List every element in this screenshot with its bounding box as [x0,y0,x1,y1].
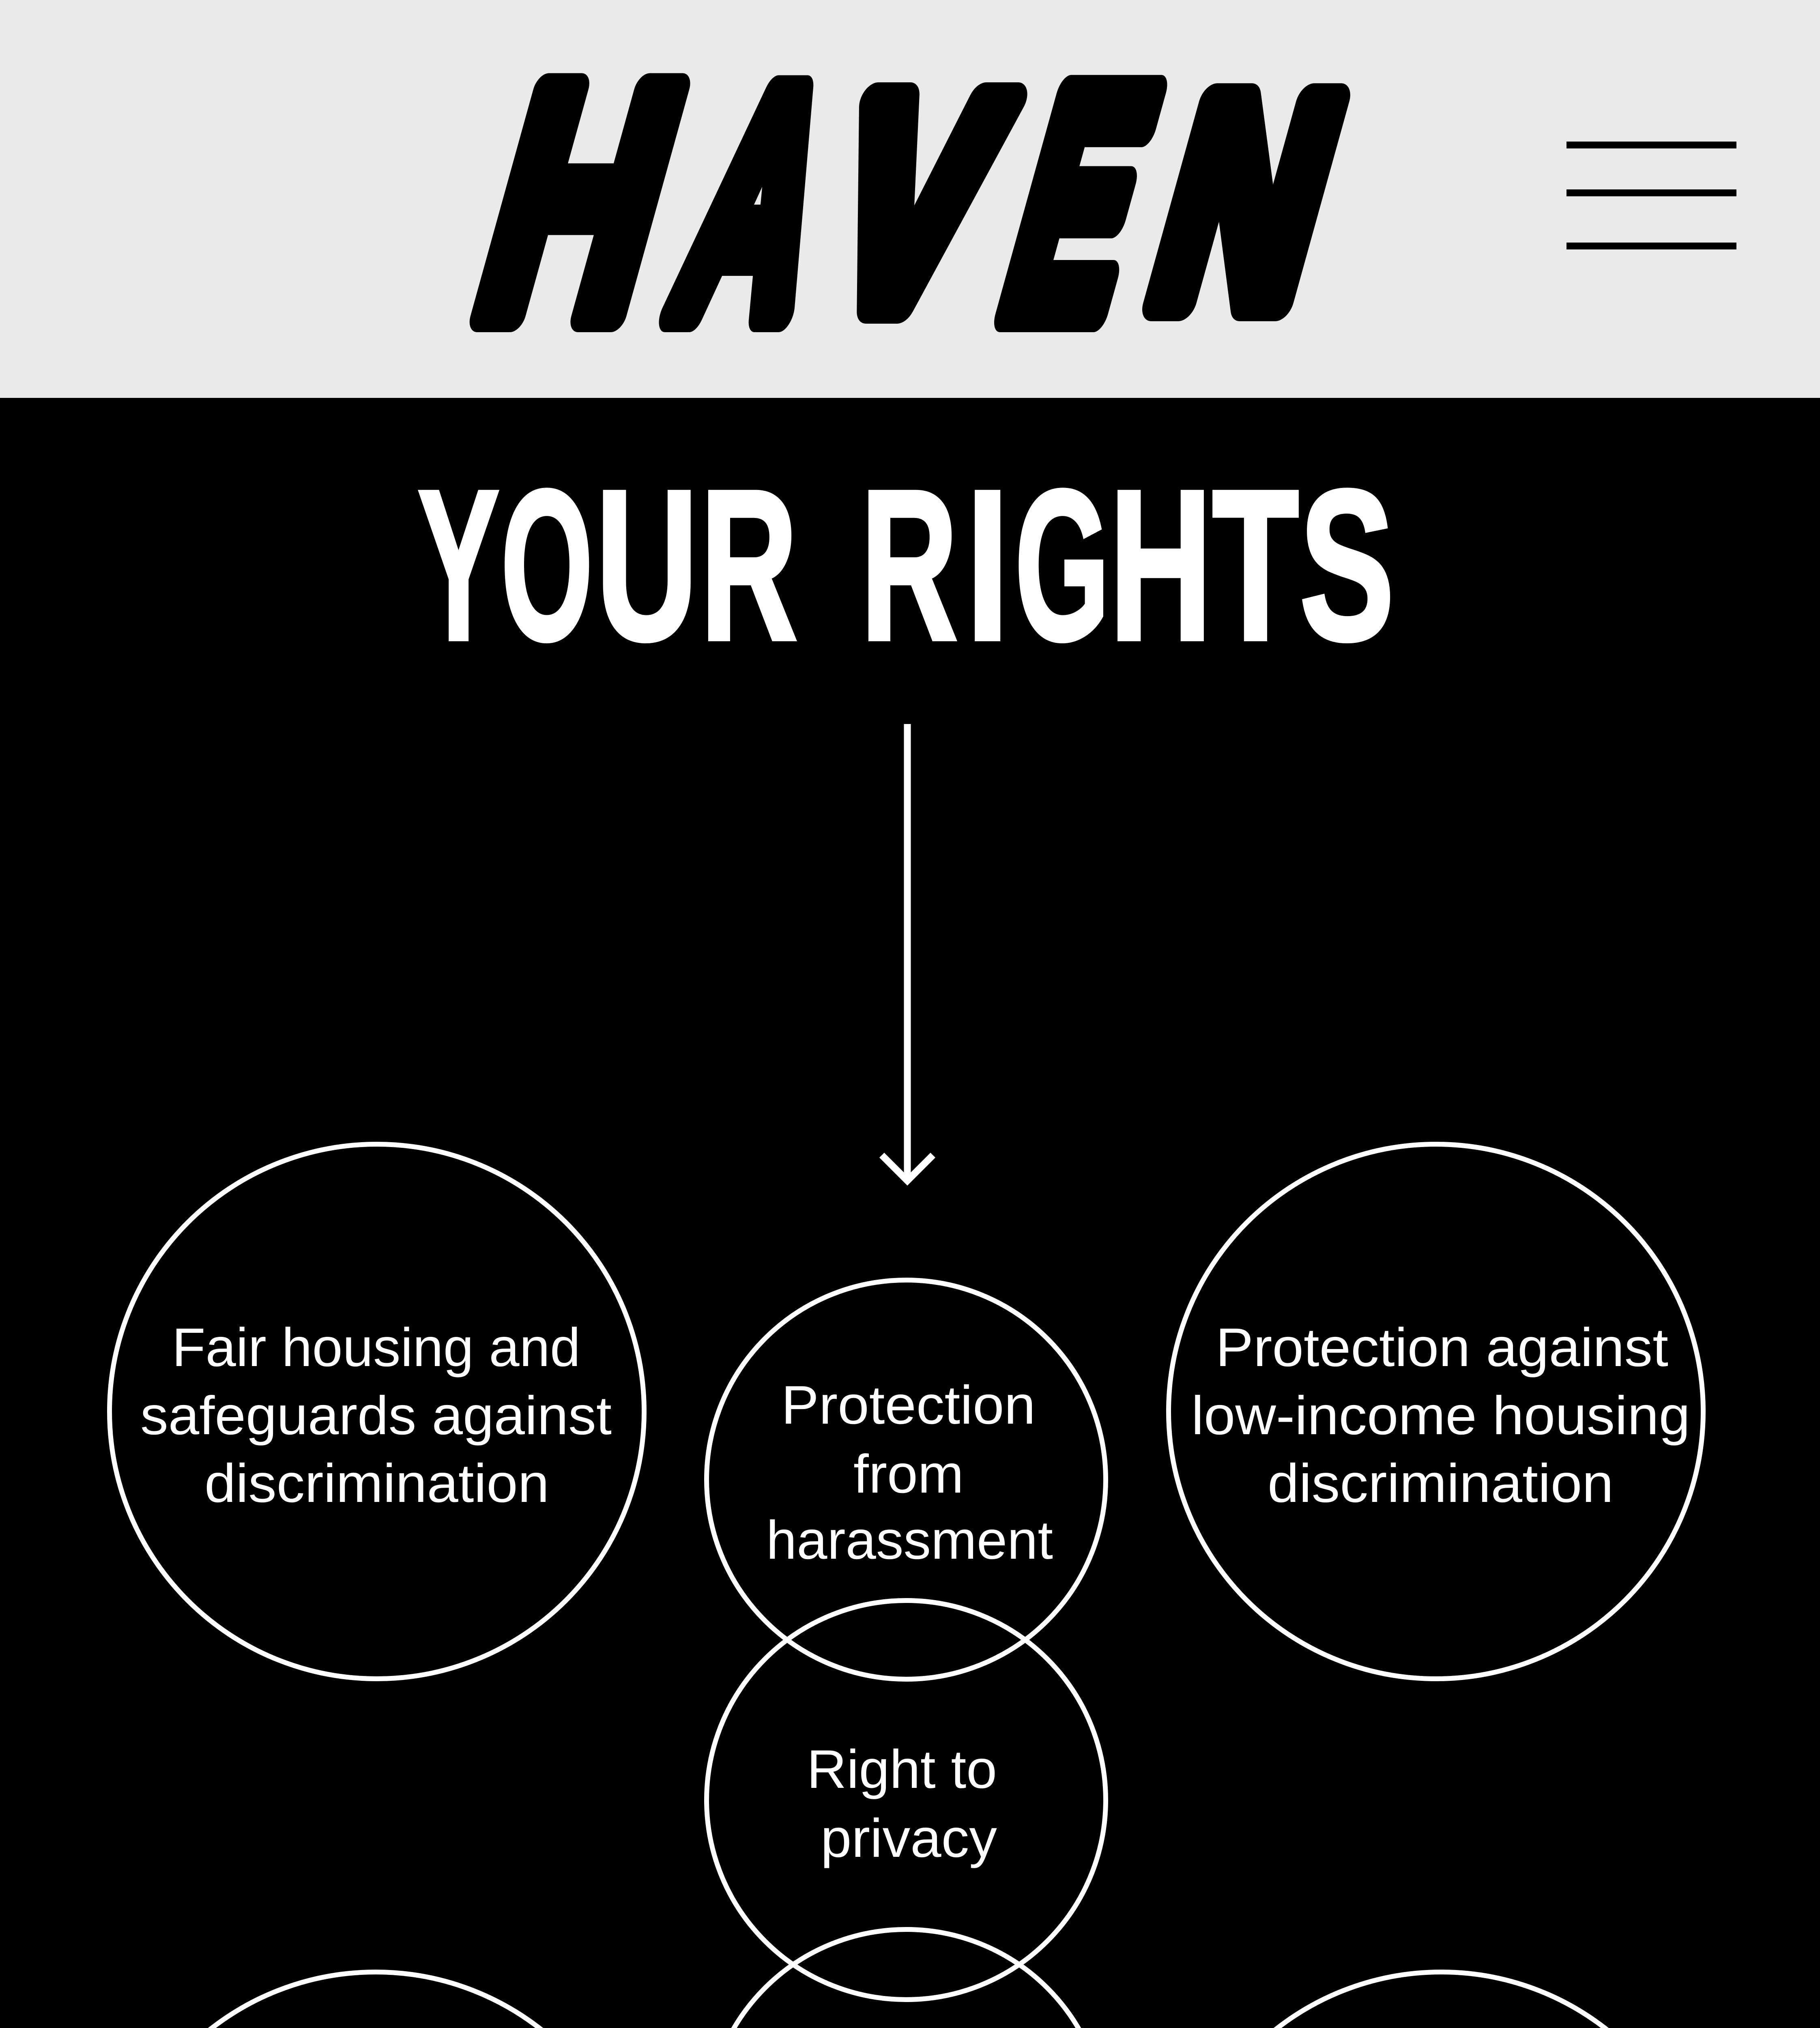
heading: YOUR RIGHTS: H [1109,445,1212,685]
heading: YOUR RIGHTS: R [861,446,958,685]
logo: HAVEN: V [797,36,1034,369]
heading: YOUR RIGHTS: I [966,446,1009,685]
heading: YOUR RIGHTS: U [596,445,698,685]
logo: HAVEN: N [1125,38,1368,365]
panel: privacy [707,1600,1106,2000]
heading: YOUR RIGHTS: G [1015,446,1110,685]
panel: low-income protection: Protection against [1216,1317,1668,1378]
header bar [0,0,1820,398]
heading: YOUR RIGHTS: S [1300,445,1394,685]
panel: fair housing: safeguards against [140,1386,612,1446]
panel: low-income protection [1169,1144,1703,1679]
panel: privacy: privacy [821,1808,997,1869]
logo: HAVEN [447,18,1368,386]
heading: YOUR RIGHTS: Y [418,446,499,685]
panel: habitable housing [707,1929,1106,2028]
heading: YOUR RIGHTS: R [700,446,797,685]
panel: harassment [707,1280,1106,1679]
panel: harassment: Protection [781,1375,1036,1435]
heading: YOUR RIGHTS: T [1212,445,1299,685]
panel: harassment: harassment [766,1510,1053,1570]
heading: YOUR RIGHTS [418,445,1394,685]
logo: HAVEN: H [447,18,713,386]
heading: YOUR RIGHTS: O [501,446,593,685]
panel: fair housing: Fair housing and [172,1317,580,1378]
panel: privacy: Right to [807,1739,997,1800]
panel: repairs [1174,1972,1708,2028]
panel: low-income protection: low-income housing [1191,1386,1690,1446]
panel: fair housing: discrimination [204,1453,549,1514]
panel: harassment: from [853,1444,964,1504]
panel: low-income protection: discrimination [1268,1453,1614,1514]
panel: unlawful evictions [108,1972,643,2028]
arrow: pointing down [882,724,933,1181]
logo: HAVEN: E [975,24,1186,382]
logo: HAVEN: A [647,24,869,382]
icon: hamburger menu [1566,142,1736,249]
panel: fair housing [110,1144,644,1679]
